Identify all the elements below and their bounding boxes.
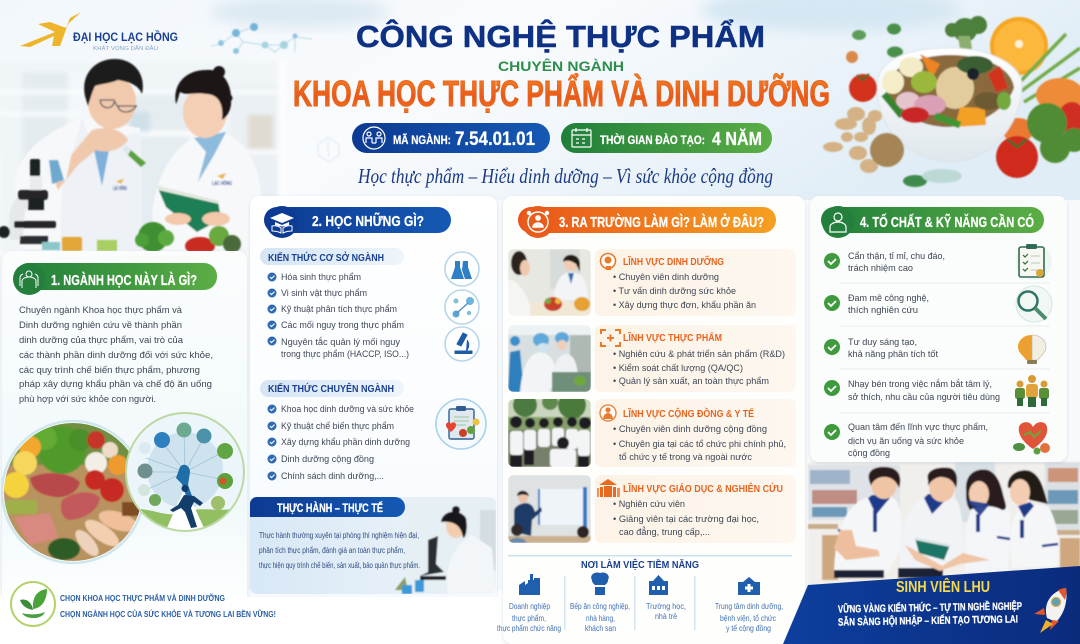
lab shelves background [0,60,286,255]
heading: section 2 [264,206,451,238]
skill: creative: Tư duy sáng tạo, [848,337,917,348]
icon: nutrition clipboard [436,399,486,449]
orange [990,17,1048,75]
skill: food interest: cộng đồng [848,448,890,459]
row: education and research careers: • Giảng viên tại các trường đại học, [613,514,759,525]
panel 4: qualities and skills [810,196,1067,462]
text: workplace labels: khách sạn [585,624,616,633]
text: workplace labels: Trung tâm dinh dưỡng, [715,602,783,611]
illustration: health and activity circle [126,413,245,535]
icon: person with tie [830,213,846,232]
student 1 [834,497,901,572]
icon: magnifier [1016,286,1052,322]
scallions [1018,34,1080,102]
person right [152,66,262,250]
icon: graduation cap on book [270,213,294,233]
row: food industry careers: LĨNH VỰC THỰC PHẨM [623,331,722,344]
heading: section 3: 3. RA TRƯỜNG LÀM GÌ? LÀM Ở ĐÂU? [559,213,764,231]
text: workplace labels: Bếp ăn công nghiệp, [570,602,630,611]
text: major description: các thành phần dinh dưỡng đối với sức khỏe, [19,350,213,361]
text: workplace labels [497,602,783,633]
box: practical training: THỰC HÀNH – THỰC TẾ [277,502,383,515]
heading: section 4 [821,206,1044,238]
row: education and research careers: cao đẳng, trung cấp,... [619,526,710,538]
tablet [915,538,950,560]
tomatoes [849,74,877,102]
banner: LHU students: SINH VIÊN LHU [896,577,990,596]
box: practical training [250,497,496,594]
text: major description: các quy trình chế biến thực phẩm, phương [19,365,200,376]
subheading: specialized knowledge: KIẾN THỨC CHUYÊN NGÀNH [268,382,394,395]
text: major description: Chuyên ngành Khoa học thực phẩm và [19,305,183,316]
row: community health careers: LĨNH VỰC CỘNG ĐỒNG & Y TẾ [623,407,754,420]
icon: person silhouette [176,465,192,496]
icon: golden bird [20,12,81,47]
section: potential workplaces [497,555,792,633]
subheading: foundation knowledge [260,248,404,265]
person left [15,59,146,250]
badge: duration [561,123,772,153]
photo: lab students [0,59,286,255]
bowl [877,48,1022,162]
icon: flasks [445,252,479,286]
badge: major code: 7.54.01.01 [455,129,535,150]
icon: food scan [601,330,620,346]
list: foundation subjects: Kỹ thuật phân tích thực phẩm [281,304,397,314]
icon: heart with produce [1013,422,1050,454]
text: major description: dinh dưỡng của thực phẩm, vai trò của [19,335,184,346]
skill: consumer insight [824,379,1000,403]
photo: students outdoors [508,399,591,467]
row: nutrition careers: LĨNH VỰC DINH DƯỠNG [623,255,724,268]
decorative molecule [211,23,339,162]
text: call to action: CHỌN KHOA HỌC THỰC PHẨM VÀ DINH DƯỠNG [60,592,225,603]
icon: people in circle [363,127,385,149]
photo: healthy food bowl [823,16,1080,187]
badge: major code: MÃ NGÀNH: [393,132,451,147]
list: specialized subjects: Khoa học dinh dưỡng và sức khỏe [281,404,414,414]
list: foundation subjects [268,272,409,359]
row: education and research careers [508,475,796,543]
icon: school building [649,575,668,595]
row: food industry careers: • Quản lý sản xuất, an toàn thực phẩm [613,376,769,387]
text: practical training description [259,531,420,570]
heading: section 3 [518,206,776,238]
student 3 [965,500,1010,572]
photo: lecturer at whiteboard [508,475,591,543]
title: CÔNG NGHỆ THỰC PHẨM [356,18,765,54]
row: community health careers [508,399,796,467]
list: specialized subjects: Xây dựng khẩu phần dinh dưỡng [281,437,410,447]
icon: group of people [1015,375,1049,407]
icon: leaf badge [11,582,55,626]
broccoli [945,16,987,42]
mask: panels fade into white [0,597,501,644]
panel 1: what is this major [0,251,247,611]
text: workplace labels: y tế cộng đồng [726,624,771,633]
banner: LHU students: VỮNG VÀNG KIẾN THỨC – TỰ TIN NGHỀ NGHIỆP [838,599,1022,616]
text: major description: Dinh dưỡng nghiên cứu về thành phần [19,320,182,331]
row: nutrition careers [508,249,796,316]
microscope and produce [0,159,241,255]
list: foundation subjects: Hóa sinh thực phẩm [281,272,361,282]
icon: checklist [1016,244,1052,280]
photo: food lab workers [508,325,591,392]
skill: creative [824,337,938,360]
icon: head with bulb [600,254,616,270]
list: foundation subjects: Vi sinh vật thực phẩm [281,288,367,298]
row: food industry careers [508,325,796,392]
skill: creative: khả năng phân tích tốt [848,349,938,360]
heading tab [250,497,405,517]
skill: passion: thích nghiên cứu [848,305,918,316]
text: workplace labels: nhà hàng, [586,614,615,623]
photo: student at microscope [395,497,496,594]
carrots [1036,78,1080,112]
skill: careful: Cẩn thận, tỉ mỉ, chu đáo, [848,251,945,262]
text: workplace labels: thực phẩm chức năng [497,624,561,633]
skill: passion [824,293,929,316]
list: specialized subjects: Kỹ thuật chế biến thực phẩm [281,421,394,431]
text: practical training description: phân tích thực phẩm, đánh giá an toàn thực phẩm, [259,546,405,555]
icon: chef hat [591,572,609,595]
text: workplace labels: Trường học, [646,602,686,611]
text: major description: pháp xây dựng khẩu phần và chế độ ăn uống [19,379,212,390]
list: foundation subjects: Các mối nguy trong thực phẩm [281,320,404,330]
subheading: specialized knowledge [260,380,404,397]
row: community health careers: • Chuyên gia tại các tổ chức phi chính phủ, [613,439,786,450]
logo: Đại học Lạc Hồng: KHÁT VỌNG DẪN ĐẦU [93,45,158,52]
icon: factory [519,574,540,595]
row: nutrition careers: • Tư vấn dinh dưỡng sức khỏe [613,286,736,297]
icon: microbes [445,290,479,324]
photo: nutrition consultation [508,249,591,316]
icon: people network [528,212,548,232]
photo: food circle [0,420,146,565]
row: nutrition careers: • Xây dựng thực đơn, khẩu phần ăn [613,300,756,311]
list: specialized subjects: Dinh dưỡng cộng đồng [281,454,374,464]
icon: school [597,479,620,497]
section: potential workplaces: NƠI LÀM VIỆC TIỀM NĂNG [581,558,699,571]
skill: food interest: Quan tâm đến lĩnh vực thực phẩm, [848,422,988,433]
skill: food interest: dịch vụ ăn uống và sức khỏe [848,436,964,447]
bookshelves [808,462,1080,580]
list: specialized subjects: Chính sách dinh dưỡng,... [281,471,384,481]
badge: duration: 4 NĂM [712,128,762,149]
person left: LẠC HỒNG [113,185,127,192]
badge: major code [352,123,550,153]
text: major description [19,305,213,405]
nuts and grains [823,107,882,173]
logo: Đại học Lạc Hồng: ĐẠI HỌC LẠC HỒNG [73,31,178,44]
skill: consumer insight: Nhạy bén trong việc nắm bắt tâm lý, [848,379,992,390]
slogan: Học thực phẩm – Hiểu dinh dưỡng – Vì sức khỏe cộng đồng [357,164,773,188]
icon: calendar [572,128,591,147]
text: major description: phù hợp với sức khỏe con người. [19,394,156,405]
subheading: foundation knowledge: KIẾN THỨC CƠ SỞ NGÀNH [268,251,384,264]
icon: runner [170,485,203,528]
skill: passion: Đam mê công nghệ, [848,293,929,304]
icon: rocket [1034,588,1067,633]
photo: LHU students [808,462,1080,587]
skill: careful [824,251,945,274]
row: food industry careers: • Nghiên cứu & phát triển sản phẩm (R&D) [613,349,785,360]
list: specialized subjects [268,404,414,481]
broccoli right [1027,103,1080,163]
icon: hospital [738,577,760,595]
icon: people [20,271,38,288]
heading: section 2: 2. HỌC NHỮNG GÌ? [312,212,424,230]
person right: LẠC HỒNG [212,180,232,187]
text: call to action: CHỌN NGÀNH HỌC CỦA SỨC KHỎE VÀ TƯƠNG LAI BỀN VỮNG! [60,608,276,619]
row: education and research careers: LĨNH VỰC GIÁO DỤC & NGHIÊN CỨU [623,482,783,495]
list: foundation subjects: trong thực phẩm (HACCP, ISO...) [281,349,409,359]
banner: LHU students: SẴN SÀNG HỘI NHẬP – KIẾN TẠO TƯƠNG LAI [838,612,1018,629]
text: workplace labels: nhà trẻ [655,612,677,621]
icon: community person [600,405,616,421]
text: workplace labels: bệnh viện, tổ chức [720,614,776,623]
text: workplace labels: Doanh nghiệp [509,602,550,611]
badge: duration: THỜI GIAN ĐÀO TẠO: [600,132,705,147]
logo: Đại học Lạc Hồng [20,12,178,52]
row: community health careers: tổ chức y tế trong và ngoài nước [619,452,752,463]
text: practical training description: Thực hành thường xuyên tại phòng thí nghiệm hiện đại, [259,531,419,540]
panel 2: what you learn [0,196,501,644]
row: nutrition careers: • Chuyên viên dinh dưỡng [613,272,719,283]
row: community health careers: • Chuyên viên dinh dưỡng cộng đồng [613,424,767,435]
skill: food interest [824,422,988,459]
panel 3: careers [497,196,1080,644]
text: practical training description: thực hiện quy trình chế biến, sản xuất, bảo quản thực phẩm. [259,561,420,570]
text: call to action [60,592,276,619]
heading: section 1: 1. NGÀNH HỌC NÀY LÀ GÌ? [51,272,197,289]
student 2 [900,497,963,570]
skill: careful: trách nhiệm cao [848,263,913,274]
title: specialization: KHOA HỌC THỰC PHẨM VÀ DINH DƯỠNG [293,72,830,114]
student 4 [1011,504,1059,568]
leaves [852,30,866,40]
skill: consumer insight: sở thích, nhu cầu của người tiêu dùng [848,392,1000,403]
text: workplace labels: thực phẩm, [512,614,546,623]
icon: microscope [445,327,479,361]
subtitle: chuyên ngành: CHUYÊN NGÀNH [498,57,624,74]
row: food industry careers: • Kiểm soát chất lượng (QA/QC) [613,363,743,374]
icon: brain bulb [1018,335,1046,364]
heading: section 1 [13,263,217,295]
banner: LHU students [783,566,1080,644]
row: education and research careers: • Nghiên cứu viên [613,499,685,510]
list: foundation subjects: Nguyên tắc quản lý mối nguy [281,337,401,347]
